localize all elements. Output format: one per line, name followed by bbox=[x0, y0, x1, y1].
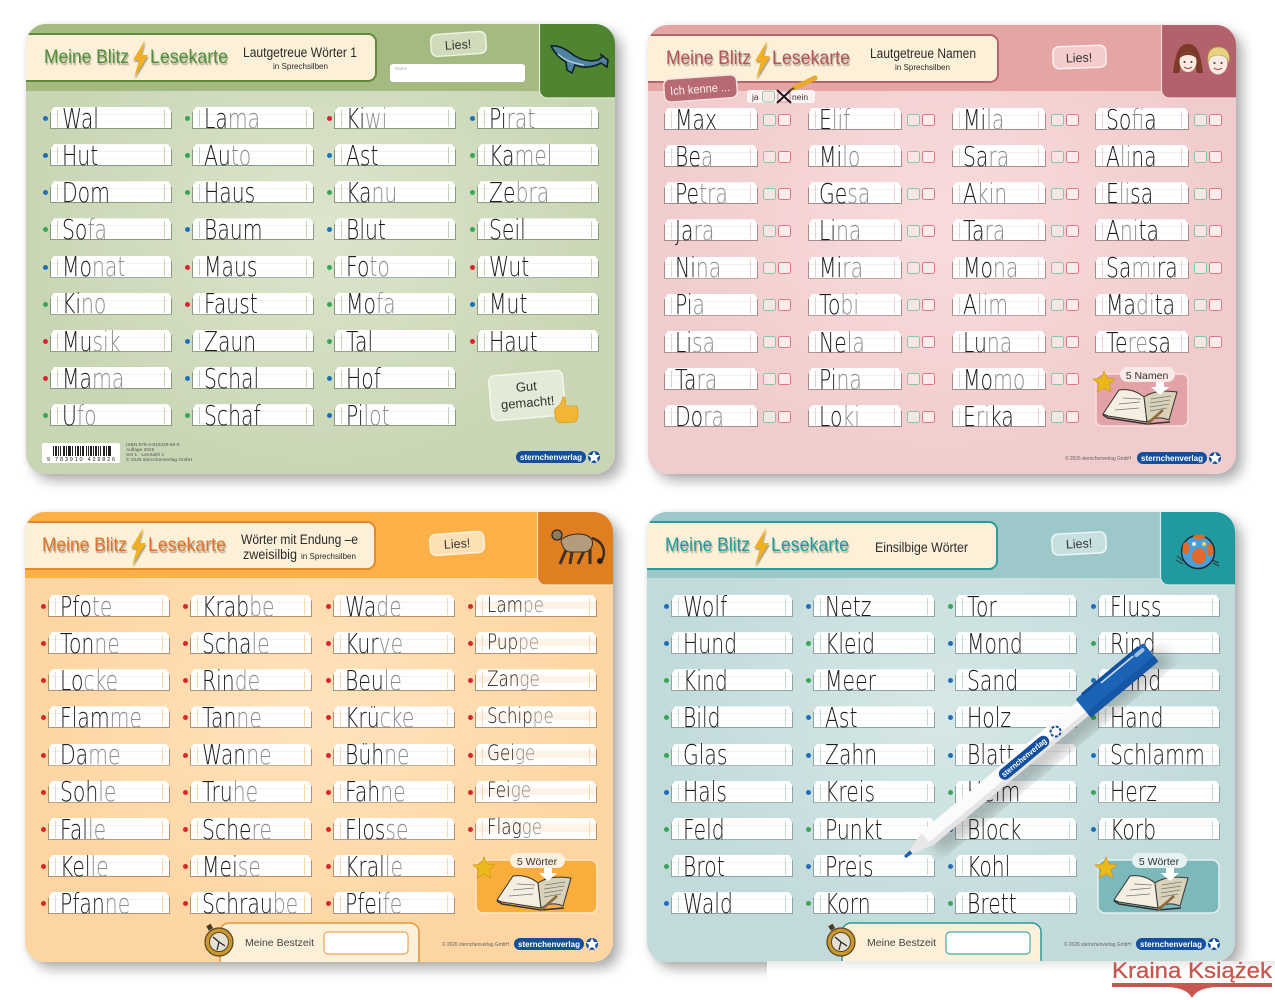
logo: Meine Blitz Lesekarte bbox=[44, 40, 228, 78]
word column 3: Foto bbox=[346, 251, 390, 283]
word column 4: Zebra bbox=[489, 177, 549, 209]
word column 4 bbox=[1091, 591, 1220, 846]
heading: Lautgetreue Namen: in Sprechsilben bbox=[895, 63, 950, 72]
star bbox=[473, 857, 495, 878]
word column 1: Flamme bbox=[60, 702, 142, 734]
icon tile: whale bbox=[540, 10, 630, 98]
word column 1: Mama bbox=[62, 363, 124, 395]
word column 2: Baum bbox=[204, 214, 263, 246]
name column 3: Akin bbox=[963, 178, 1007, 210]
word column 1: Wald bbox=[683, 888, 733, 920]
name column 1: Petra bbox=[675, 178, 728, 210]
header band bbox=[26, 24, 615, 91]
icon: stopwatch bbox=[205, 924, 233, 956]
word column 1 bbox=[664, 591, 793, 920]
word column 4: Herz bbox=[1110, 776, 1157, 808]
word column 2 bbox=[806, 591, 935, 920]
word column 3: Tal bbox=[346, 326, 373, 358]
word column 4: Fluss bbox=[1110, 591, 1161, 623]
word column 4: Mut bbox=[489, 288, 527, 320]
name column 3: Alim bbox=[963, 289, 1008, 321]
word column 1: Wal bbox=[62, 103, 99, 135]
name field: Name bbox=[395, 66, 408, 71]
icon: stopwatch bbox=[827, 924, 855, 956]
publisher logo: sternchenverlag bbox=[1141, 453, 1203, 463]
name column 4: Elisa bbox=[1106, 178, 1153, 210]
word column 3: Mond bbox=[967, 628, 1023, 660]
header band bbox=[647, 512, 1235, 578]
header label background bbox=[9, 522, 375, 569]
word column 2: Faust bbox=[204, 288, 258, 320]
word column 1: Ufo bbox=[62, 400, 97, 432]
word column 3: Hof bbox=[346, 363, 381, 395]
header band bbox=[25, 512, 613, 578]
icon: thumbs up bbox=[555, 397, 578, 423]
header label background bbox=[10, 34, 376, 81]
word column 1: Sofa bbox=[62, 214, 107, 246]
icon tile: monkey bbox=[538, 498, 628, 585]
word column 3 bbox=[326, 591, 455, 920]
word column 3: Krücke bbox=[345, 702, 414, 734]
word column 3: Pfeife bbox=[345, 888, 402, 920]
word column 1: Feld bbox=[683, 814, 725, 846]
word column 4: Schlamm bbox=[1110, 739, 1205, 771]
heading: Lautgetreue Wörter 1: Lautgetreue Wörter 1 bbox=[243, 45, 357, 60]
icon: pencil bbox=[789, 78, 815, 91]
word column 1: Kelle bbox=[60, 851, 109, 883]
panel: pink card Lautgetreue Namen bbox=[648, 25, 1236, 474]
logo: Meine Blitz Lesekarte: Meine Blitz bbox=[42, 534, 127, 556]
logo: Meine Blitz Lesekarte: Lesekarte bbox=[148, 534, 226, 556]
Lies! badge bbox=[429, 531, 485, 556]
best time tab bbox=[842, 923, 1041, 983]
word column 2: Auto bbox=[204, 140, 251, 172]
name column 2: Pina bbox=[819, 364, 862, 396]
heading: Lautgetreue Wörter 1 bbox=[243, 45, 357, 71]
word column 4: Schippe bbox=[487, 704, 554, 729]
word column 2: Krabbe bbox=[202, 591, 275, 623]
word column 4: Wind bbox=[1110, 665, 1161, 697]
word column 2: Punkt bbox=[825, 814, 882, 846]
word column 4: Geige bbox=[487, 741, 535, 766]
badge: Ich kenne bbox=[663, 74, 738, 102]
callout: Gut gemacht: gemacht! bbox=[500, 393, 555, 412]
word column 2 bbox=[183, 591, 312, 920]
callout: Gut gemacht bbox=[488, 370, 566, 421]
name column 4: Alina bbox=[1106, 141, 1157, 173]
word column 3: Kohl bbox=[967, 851, 1010, 883]
word column 3: Kanu bbox=[346, 177, 397, 209]
word column 2: Truhe bbox=[202, 776, 258, 808]
word column 1: Hut bbox=[62, 140, 98, 172]
word column 1: Musik bbox=[62, 326, 121, 358]
heading: Lautgetreue Namen: Lautgetreue Namen bbox=[870, 46, 976, 61]
word column 3: Mofa bbox=[346, 288, 396, 320]
name column 2 bbox=[808, 104, 935, 433]
heading: Wörter mit Endung -e: zweisilbig bbox=[243, 547, 297, 562]
word column 2: Schere bbox=[202, 814, 272, 846]
word column 4: Zange bbox=[487, 667, 540, 692]
task panel: 5 Wörter: 5 Wörter bbox=[1139, 856, 1180, 868]
copyright: © 2026 sternchenverlag GmbH bbox=[1065, 455, 1131, 462]
word column 1: Pfanne bbox=[60, 888, 130, 920]
word column 1: Locke bbox=[60, 665, 118, 697]
best time tab: Meine Bestzeit bbox=[245, 937, 314, 949]
word column 2: Kreis bbox=[825, 776, 875, 808]
logo: Meine Blitz Lesekarte bbox=[42, 528, 226, 566]
word column 1: Dame bbox=[60, 739, 120, 771]
word column 3: Pilot bbox=[346, 400, 390, 432]
panel: orange card Wörter mit Endung -e bbox=[25, 512, 613, 962]
name column 1: Dora bbox=[675, 401, 724, 433]
word column 2: Schal bbox=[204, 363, 259, 395]
name column 4 bbox=[1095, 104, 1222, 359]
copyright: © 2026 sternchenverlag GmbH bbox=[1064, 941, 1131, 948]
barcode: 9 783910 429826 bbox=[47, 457, 115, 463]
word column 2: Zaun bbox=[204, 326, 256, 358]
publisher logo bbox=[1137, 452, 1221, 464]
Lies! badge: Lies! bbox=[1066, 536, 1093, 552]
legend: ja / nein: ja bbox=[751, 92, 759, 102]
word column 4: Hand bbox=[1110, 702, 1164, 734]
imprint text: ISBN 978-3-910429-82-6 bbox=[126, 442, 180, 448]
word column 1: Kind bbox=[683, 665, 728, 697]
publisher logo: sternchenverlag bbox=[518, 939, 580, 949]
watermark: Kraina Książek: Kraina Książek bbox=[1112, 958, 1273, 983]
task panel: 5 Wörter bbox=[1098, 853, 1219, 913]
word column 3: Fahne bbox=[345, 776, 406, 808]
legend: ja / nein bbox=[747, 90, 815, 103]
word column 3: Bühne bbox=[345, 739, 410, 771]
logo: Meine Blitz Lesekarte bbox=[665, 528, 849, 566]
word column 4: Feige bbox=[487, 778, 531, 803]
publisher logo: sternchenverlag bbox=[520, 452, 582, 462]
name column 2: Elif bbox=[819, 104, 850, 136]
heading: Lautgetreue Namen bbox=[870, 46, 976, 72]
publisher logo bbox=[1136, 938, 1220, 950]
word column 1: Hund bbox=[683, 628, 737, 660]
name column 3: Tara bbox=[963, 215, 1005, 247]
name column 1: Lisa bbox=[675, 327, 715, 359]
word column 2: Wanne bbox=[202, 739, 272, 771]
word column 2: Schale bbox=[202, 628, 270, 660]
word column 4: Lampe bbox=[487, 593, 544, 618]
marker pen: sternchenverlag bbox=[1000, 736, 1049, 779]
word column 2: Kleid bbox=[825, 628, 875, 660]
task panel: 5 Wörter bbox=[476, 853, 597, 913]
name column 2: Nela bbox=[819, 327, 865, 359]
word column 2: Tanne bbox=[202, 702, 262, 734]
word column 4: Seil bbox=[489, 214, 526, 246]
watermark: Kraina Książek bbox=[1112, 958, 1273, 998]
word column 1: Falle bbox=[60, 814, 106, 846]
task panel: 5 Namen bbox=[1096, 367, 1188, 426]
icon tile: two children bbox=[1162, 11, 1252, 98]
logo: Meine Blitz Lesekarte: Meine Blitz bbox=[44, 46, 129, 68]
logo: Meine Blitz Lesekarte: Meine Blitz bbox=[665, 534, 750, 556]
bottom white strip bbox=[767, 961, 1275, 1000]
Lies! badge: Lies! bbox=[1066, 51, 1092, 65]
word column 3 bbox=[327, 103, 456, 432]
word column 1 bbox=[41, 591, 170, 920]
imprint text: © 2026 sternchenverlag GmbH bbox=[126, 456, 193, 463]
header label background bbox=[632, 35, 998, 82]
icon tile: ball creature bbox=[1160, 498, 1250, 585]
heading: Lautgetreue Wörter 1: in Sprechsilben bbox=[273, 62, 328, 71]
word column 3: Kiwi bbox=[346, 103, 387, 135]
word column 1: Dom bbox=[62, 177, 110, 209]
star bbox=[1093, 371, 1115, 392]
word column 3 bbox=[948, 591, 1077, 920]
word column 3: Blut bbox=[346, 214, 386, 246]
Lies! badge: Lies! bbox=[443, 536, 471, 552]
word column 1: Sohle bbox=[60, 776, 116, 808]
word column 2: Haus bbox=[204, 177, 255, 209]
Lies! badge bbox=[430, 31, 487, 57]
imprint text bbox=[126, 442, 193, 463]
name column 2: Loki bbox=[819, 401, 860, 433]
publisher logo bbox=[516, 451, 600, 463]
name column 1: Bea bbox=[675, 141, 713, 173]
word column 4: Pirat bbox=[489, 103, 535, 135]
word column 2: Ast bbox=[825, 702, 858, 734]
name column 4: Anita bbox=[1106, 215, 1159, 247]
word column 4: Korb bbox=[1110, 814, 1156, 846]
name column 3: Mona bbox=[963, 252, 1018, 284]
word column 1: Brot bbox=[683, 851, 725, 883]
word column 2: Preis bbox=[825, 851, 874, 883]
logo: Meine Blitz Lesekarte: Meine Blitz bbox=[666, 47, 751, 69]
name column 4: Teresa bbox=[1106, 327, 1171, 359]
word column 2: Rinde bbox=[202, 665, 260, 697]
barcode bbox=[42, 443, 120, 463]
word column 2: Schraube bbox=[202, 888, 298, 920]
name column 1 bbox=[664, 104, 791, 433]
word column 3: Flosse bbox=[345, 814, 409, 846]
word column 4: Haut bbox=[489, 326, 538, 358]
word column 3: Ast bbox=[346, 140, 379, 172]
imprint text: Auflage 2026 bbox=[126, 447, 155, 453]
word column 3: Helm bbox=[967, 776, 1020, 808]
word column 3: Sand bbox=[967, 665, 1018, 697]
word column 3: Wade bbox=[345, 591, 402, 623]
name column 3: Sara bbox=[963, 141, 1009, 173]
word column 4 bbox=[468, 593, 597, 840]
name column 3: Erika bbox=[963, 401, 1014, 433]
name column 3: Momo bbox=[963, 364, 1025, 396]
name column 3: Luna bbox=[963, 327, 1012, 359]
word column 2: Meer bbox=[825, 665, 876, 697]
word column 3: Holz bbox=[967, 702, 1011, 734]
badge: Ich kenne: Ich kenne ... bbox=[670, 80, 730, 98]
word column 2: Maus bbox=[204, 251, 258, 283]
name column 2: Milo bbox=[819, 141, 860, 173]
logo: Meine Blitz Lesekarte bbox=[666, 41, 850, 79]
callout: Gut gemacht: Gut bbox=[515, 378, 538, 395]
name column 2: Mira bbox=[819, 252, 863, 284]
word column 3: Blatt bbox=[967, 739, 1014, 771]
word column 3: Beule bbox=[345, 665, 402, 697]
word column 2: Korn bbox=[825, 888, 871, 920]
word column 4 bbox=[470, 103, 599, 358]
name field bbox=[390, 64, 525, 82]
word column 1: Pfote bbox=[60, 591, 112, 623]
Lies! badge bbox=[1053, 45, 1106, 69]
word column 4: Flagge bbox=[487, 815, 542, 840]
name column 2: Lina bbox=[819, 215, 861, 247]
word column 3: Tor bbox=[967, 591, 997, 623]
name column 1: Pia bbox=[675, 289, 705, 321]
Lies! badge: Lies! bbox=[444, 37, 472, 53]
word column 4: Wut bbox=[489, 251, 529, 283]
heading: Einsilbige Wörter: Einsilbige Wörter bbox=[875, 540, 968, 555]
best time tab: Meine Bestzeit bbox=[867, 937, 936, 949]
name column 4: Madita bbox=[1106, 289, 1175, 321]
word column 3: Brett bbox=[967, 888, 1017, 920]
logo: Meine Blitz Lesekarte: Lesekarte bbox=[771, 534, 849, 556]
word column 1: Monat bbox=[62, 251, 125, 283]
header label background bbox=[631, 522, 997, 569]
logo: Meine Blitz Lesekarte: Lesekarte bbox=[772, 47, 850, 69]
panel: green card Lautgetreue Wörter 1 bbox=[26, 24, 615, 474]
word column 1: Wolf bbox=[683, 591, 727, 623]
word column 1: Kino bbox=[62, 288, 106, 320]
name column 1: Nina bbox=[675, 252, 721, 284]
word column 4: Kamel bbox=[489, 140, 552, 172]
logo: Meine Blitz Lesekarte: Lesekarte bbox=[150, 46, 228, 68]
name column 2: Tobi bbox=[819, 289, 859, 321]
header band bbox=[648, 25, 1236, 91]
publisher logo: sternchenverlag bbox=[1140, 939, 1202, 949]
copyright: © 2026 sternchenverlag GmbH bbox=[442, 941, 509, 948]
panel: teal card Einsilbige Wörter bbox=[647, 512, 1235, 962]
word column 3: Kurve bbox=[345, 628, 403, 660]
word column 4: Rind bbox=[1110, 628, 1156, 660]
name column 3: Mila bbox=[963, 104, 1004, 136]
name column 4: Sofia bbox=[1106, 104, 1157, 136]
word column 3: Block bbox=[967, 814, 1021, 846]
publisher logo bbox=[514, 938, 598, 950]
name column 1: Max bbox=[675, 104, 717, 136]
word column 1 bbox=[43, 103, 172, 432]
legend: ja / nein: nein bbox=[792, 92, 808, 102]
best time tab bbox=[220, 923, 419, 983]
heading: Wörter mit Endung -e: in Sprechsilben bbox=[301, 552, 356, 561]
word column 1: Glas bbox=[683, 739, 728, 771]
heading: Wörter mit Endung -e: Wörter mit Endung –e bbox=[241, 532, 358, 547]
name column 2: Gesa bbox=[819, 178, 870, 210]
word column 1: Hals bbox=[683, 776, 727, 808]
word column 2: Lama bbox=[204, 103, 260, 135]
word column 2: Zahn bbox=[825, 739, 877, 771]
name column 1: Jara bbox=[675, 215, 714, 247]
heading: Wörter mit Endung -e bbox=[241, 532, 358, 562]
word column 3: Kralle bbox=[345, 851, 403, 883]
word column 2: Meise bbox=[202, 851, 261, 883]
word column 4: Puppe bbox=[487, 630, 539, 655]
word column 2: Schaf bbox=[204, 400, 261, 432]
word column 1: Bild bbox=[683, 702, 721, 734]
name column 3 bbox=[952, 104, 1079, 433]
word column 1: Tonne bbox=[60, 628, 120, 660]
task panel: 5 Wörter: 5 Wörter bbox=[517, 856, 558, 868]
imprint text: Set 1 · Lerntafel 1 bbox=[126, 452, 164, 458]
star bbox=[1095, 857, 1117, 878]
word column 2 bbox=[185, 103, 314, 432]
word column 2: Netz bbox=[825, 591, 871, 623]
name column 1: Tara bbox=[675, 364, 717, 396]
Lies! badge bbox=[1052, 532, 1107, 555]
task panel: 5 Namen: 5 Namen bbox=[1126, 370, 1168, 382]
name column 4: Samira bbox=[1106, 252, 1178, 284]
